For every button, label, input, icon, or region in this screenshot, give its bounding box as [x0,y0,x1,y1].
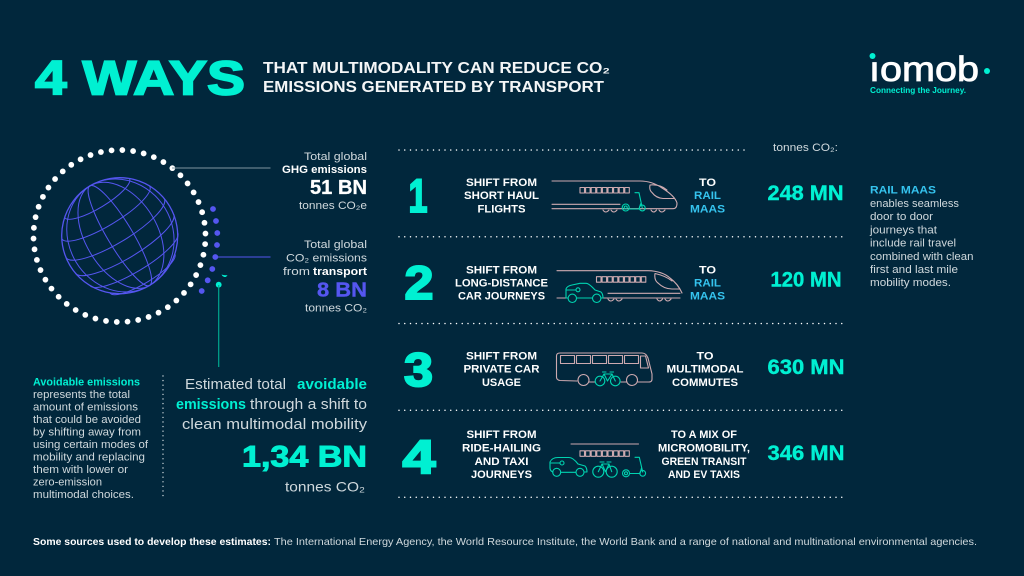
callout: estimated avoidable emissions: avoidable [297,376,367,393]
to label: TO A MIX OF [671,429,737,441]
footer: sources: Some sources used to develop these estimates: [33,536,271,548]
to label [690,264,725,303]
value: 120 MN [770,268,842,292]
to label [690,177,725,215]
from label [455,264,548,303]
from label: CAR JOURNEYS [458,291,545,303]
connector: avoidable emissions leader [218,285,220,367]
from label: SHIFT FROM [466,429,536,441]
table header: tonnes CO2: tonnes CO₂: [773,142,838,154]
teal dot: avoidable emissions [216,274,228,288]
chart: dotted emissions ring [34,150,228,322]
to label: COMMUTES [672,377,738,389]
stat: transport CO2 emissions: from [283,266,310,278]
white dots: total GHG emissions [34,150,206,322]
from label [464,350,540,389]
icon: train with car [557,271,682,302]
callout: estimated avoidable emissions: tonnes CO₂ [285,478,365,494]
stat: total global GHG emissions: Total global [304,151,367,163]
text block: avoidable emissions definition: using certain modes of [33,439,149,451]
stat: transport CO2 emissions: 8 BN [317,280,367,302]
text block: rail MaaS definition: RAIL MAAS [870,184,936,196]
icon: train, car, bicycle and scooter [550,444,646,477]
row 4: ride-hailing and taxi journeys to a mix of modes [402,429,844,483]
to label: TO [696,350,714,362]
stat: transport CO2 emissions [283,239,368,314]
value: 346 MN [768,442,844,465]
to label: MICROMOBILITY, [658,442,750,454]
to label [666,350,744,389]
stat: total global GHG emissions: GHG emissions [282,164,367,176]
from label: SHORT HAUL [464,190,539,202]
from label: PRIVATE CAR [464,364,540,376]
text block: rail MaaS definition: combined with clean [870,251,974,263]
row 3: private car usage to multimodal commutes [404,343,844,396]
text block: avoidable emissions definition: represents the total [33,389,130,401]
text block: rail MaaS definition: enables seamless [870,198,959,210]
callout: estimated avoidable emissions: emissions [176,396,246,413]
connector: transport emissions leader [215,256,270,258]
icon: bus with bicycle [556,353,652,386]
text block: avoidable emissions definition: multimodal choices. [33,489,134,501]
text block: avoidable emissions definition: by shifting away from [33,426,141,438]
row 1: short haul flights to rail MaaS [408,169,844,222]
number 3: 3 [404,343,433,396]
text block: avoidable emissions definition: Avoidable emissions [33,376,140,388]
number 4: 4 [402,430,436,483]
from label: RIDE-HAILING [462,442,541,454]
from label: AND TAXI [474,456,528,468]
from label [464,177,539,215]
footer: sources: The International Energy Agency, the World Resource Institute, the World Bank and a range of national and multinational environmental agencies. [274,536,977,548]
from label: FLIGHTS [478,203,526,215]
title: THAT MULTIMODALITY CAN REDUCE CO₂ [263,60,610,77]
logo: iomob [869,50,990,95]
value: 630 MN [768,356,844,379]
text block: rail MaaS definition: mobility modes. [870,277,951,289]
stat: transport CO2 emissions: transport [313,266,367,278]
text block: avoidable emissions definition: mobility and replacing [33,452,145,464]
text block: avoidable emissions definition: zero-emission [33,476,102,488]
title [35,52,610,106]
from label: SHIFT FROM [466,350,537,362]
callout: estimated avoidable emissions: Estimated total [185,376,286,393]
from label [462,429,541,481]
callout: estimated avoidable emissions: 1,34 BN [242,440,367,474]
number 2: 2 [404,256,434,309]
text block: rail MaaS definition: include rail travel [870,238,956,250]
from label: SHIFT FROM [466,177,537,189]
to label: TO [699,177,716,189]
from label: SHIFT FROM [466,264,537,276]
number 1: 1 [408,169,428,222]
icon: wireframe globe [40,156,199,315]
title: 4 WAYS [35,52,245,106]
logo: iomob: Connecting the Journey. [870,85,966,95]
stat: transport CO2 emissions: Total global [304,239,367,251]
icon: train with scooter [552,181,677,212]
logo: iomob: ıomob [869,50,979,89]
to label: MAAS [690,203,725,215]
callout: estimated avoidable emissions [176,376,368,494]
stat: total global GHG emissions: tonnes CO₂e [299,200,367,212]
blue dots: transport emissions [199,206,220,294]
value: 248 MN [768,182,844,205]
text block: avoidable emissions definition: them with lower or [33,464,128,476]
to label [658,429,750,481]
text block: rail MaaS definition: door to door [870,211,933,223]
to label: AND EV TAXIS [668,469,740,481]
from label: LONG-DISTANCE [455,278,548,290]
text block: avoidable emissions definition: that could be avoided [33,414,141,426]
text block: avoidable emissions definition [33,376,149,501]
to label: MAAS [690,291,725,303]
to label: GREEN TRANSIT [662,456,747,468]
from label: USAGE [482,377,521,389]
to label: RAIL [694,190,721,202]
callout: estimated avoidable emissions: clean multimodal mobility [182,416,368,433]
stat: transport CO2 emissions: tonnes CO₂ [305,302,367,314]
text block: rail MaaS definition: journeys that [869,224,937,236]
title: EMISSIONS GENERATED BY TRANSPORT [263,79,604,96]
text block: rail MaaS definition: first and last mile [870,264,958,276]
from label: JOURNEYS [471,469,532,481]
text block: rail MaaS definition [869,184,974,289]
to label: RAIL [694,278,721,290]
stat: total global GHG emissions: 51 BN [310,177,367,199]
stat: transport CO2 emissions: CO₂ emissions [286,252,368,264]
row 2: long-distance car journeys to rail MaaS [404,256,842,309]
text block: avoidable emissions definition: amount of emissions [33,402,139,414]
callout: estimated avoidable emissions: through a shift to [250,396,367,413]
connector: GHG emissions leader [172,167,270,169]
to label: TO [699,264,716,276]
to label: MULTIMODAL [666,364,744,376]
stat: total global GHG emissions [282,151,367,212]
